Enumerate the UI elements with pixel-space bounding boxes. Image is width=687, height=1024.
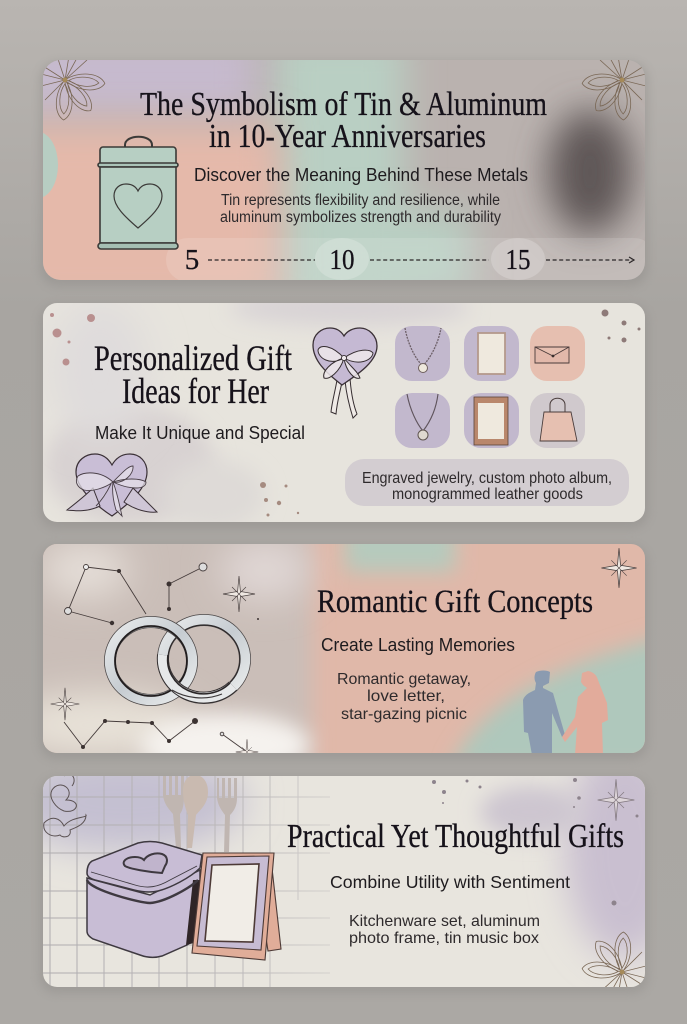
description xyxy=(337,671,471,723)
panel: romantic gift concepts xyxy=(42,544,646,758)
icon: heart tin box xyxy=(87,842,204,957)
icon: heart with bow xyxy=(67,454,157,516)
title: Practical Yet Thoughtful Gifts xyxy=(287,818,624,855)
star bottom left xyxy=(51,688,79,720)
timeline: 5 xyxy=(185,244,199,276)
subheading: Discover the Meaning Behind These Metals xyxy=(194,165,528,185)
title xyxy=(140,86,547,155)
title: Personalized Gift xyxy=(94,338,292,378)
tile: necklace coin pendant xyxy=(395,393,450,448)
description: Romantic getaway, xyxy=(337,671,471,688)
cutlery xyxy=(163,775,237,852)
subheading: Combine Utility with Sentiment xyxy=(330,872,570,892)
title: The Symbolism of Tin & Aluminum xyxy=(140,86,547,123)
star top right xyxy=(601,548,637,588)
panel: personalized gift ideas xyxy=(40,290,648,530)
title xyxy=(94,338,292,411)
subheading: Create Lasting Memories xyxy=(321,635,515,655)
title: Ideas for Her xyxy=(122,371,269,411)
description pill xyxy=(345,459,629,506)
flower bottom right xyxy=(582,932,645,987)
grid lines xyxy=(43,776,330,987)
description: Kitchenware set, aluminum xyxy=(349,913,540,930)
panel: tin and aluminum symbolism xyxy=(40,60,648,284)
mint half circle xyxy=(43,133,58,197)
tile: leather envelope clutch xyxy=(530,326,585,381)
fork right xyxy=(217,778,237,852)
icon: heart with ribbon xyxy=(313,328,377,418)
star top right xyxy=(598,779,634,821)
star near rings xyxy=(223,576,255,612)
description: Tin represents flexibility and resilience, while xyxy=(221,192,500,209)
couple silhouette xyxy=(523,670,608,755)
subheading: Make It Unique and Special xyxy=(95,423,305,443)
tile: necklace round pendant xyxy=(395,326,450,381)
fork left xyxy=(163,776,184,848)
icon: interlocked rings xyxy=(110,620,245,700)
doodle flowers xyxy=(44,774,86,837)
description pill: monogrammed leather goods xyxy=(392,486,583,503)
description pill: Engraved jewelry, custom photo album, xyxy=(362,470,612,487)
icon: tin canister xyxy=(98,137,178,249)
timeline: 10 xyxy=(330,244,354,276)
timeline xyxy=(185,238,634,280)
panel: practical yet thoughtful gifts xyxy=(40,776,648,992)
flower top left xyxy=(41,56,106,120)
description xyxy=(220,192,501,226)
title: in 10-Year Anniversaries xyxy=(209,118,486,155)
description: star-gazing picnic xyxy=(341,706,467,723)
tile: slim photo frame xyxy=(464,326,519,381)
spoon xyxy=(183,775,208,848)
constellations xyxy=(64,563,259,752)
man silhouette xyxy=(523,670,565,755)
tile: handbag xyxy=(530,393,585,448)
tile: wooden photo frame xyxy=(464,393,519,448)
description xyxy=(349,913,540,947)
flower top right xyxy=(581,56,646,120)
title: Romantic Gift Concepts xyxy=(317,584,593,620)
sparkle dots xyxy=(432,778,638,906)
icon: aluminum photo frame xyxy=(192,853,281,960)
woman silhouette xyxy=(562,671,608,755)
timeline: 15 xyxy=(506,244,530,276)
description: love letter, xyxy=(367,688,445,705)
description: aluminum symbolizes strength and durability xyxy=(220,209,501,226)
description: photo frame, tin music box xyxy=(349,930,539,947)
icon grid: gift ideas xyxy=(395,326,585,448)
arrow xyxy=(629,257,634,263)
star small bottom xyxy=(236,739,258,753)
paint splatter dots xyxy=(50,310,640,516)
